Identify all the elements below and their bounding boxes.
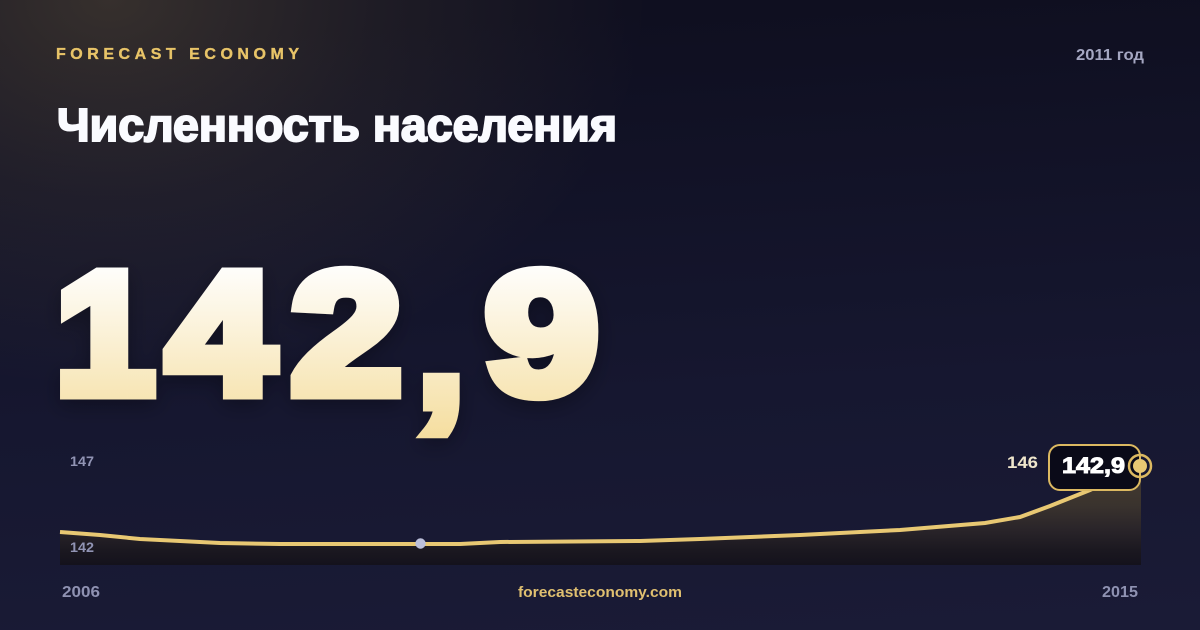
tooltip: 142,9 [1062,453,1125,478]
tooltip [1049,445,1140,490]
axis label 147: 147 [70,453,94,469]
year label: 2011 год [1076,47,1144,64]
end year: 2015 [1102,584,1138,601]
big value: 9 [485,236,598,430]
area chart [60,445,1151,565]
chart area fill [60,466,1141,565]
end marker [1129,455,1151,477]
mid marker [415,538,426,549]
axis label 142: 142 [70,539,94,555]
big value: 4 [167,236,274,430]
big value: 1 [56,237,155,430]
title: Численность населения [57,99,617,151]
big value: , [418,249,465,442]
big value: 2 [291,236,402,430]
start year: 2006 [62,584,100,601]
value label 146: 146 [1007,453,1038,472]
source: forecasteconomy.com [518,584,682,601]
chart line [60,466,1141,544]
big value [56,236,598,442]
brand label: FORECAST ECONOMY [56,46,299,63]
